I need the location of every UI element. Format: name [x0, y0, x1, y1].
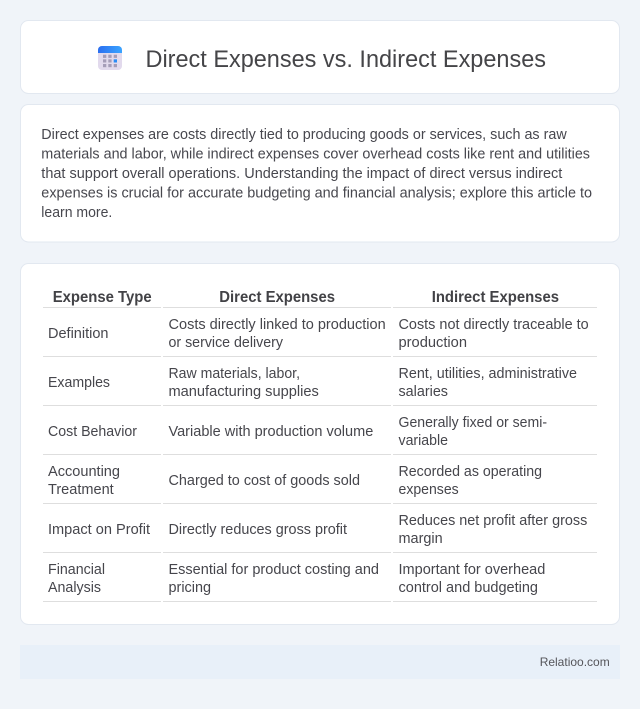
text block: introduction paragraph: expenses is crucial for accurate budgeting and financial analysis; explore this article to — [41, 186, 592, 202]
table header row: Direct Expenses — [219, 289, 335, 306]
panel: introduction — [20, 104, 620, 242]
row: Accounting Treatment: Charged to cost of goods sold — [168, 473, 360, 489]
table header row: Expense Type — [53, 289, 152, 306]
row: Financial Analysis: Essential for product costing and — [168, 562, 379, 578]
row: Examples: salaries — [398, 384, 448, 400]
table header row — [53, 289, 559, 306]
title: Direct Expenses vs. Indirect Expenses — [146, 46, 546, 73]
row: Cost Behavior — [48, 415, 547, 449]
row: Definition: Costs not directly traceable to — [398, 317, 589, 333]
row: Examples: manufacturing supplies — [168, 384, 319, 400]
row: Accounting Treatment: Accounting — [48, 464, 120, 480]
text block: introduction paragraph: that support overall operations. Understanding the impact of direct versus indirect — [41, 166, 562, 182]
row: Impact on Profit — [48, 513, 587, 547]
row: Financial Analysis: Analysis — [48, 580, 101, 596]
row: Definition — [48, 317, 589, 351]
row: Accounting Treatment: expenses — [398, 482, 459, 498]
table header row: Indirect Expenses — [432, 289, 559, 306]
row: Cost Behavior: variable — [398, 433, 448, 449]
footer bar — [20, 645, 620, 679]
row: Impact on Profit: Directly reduces gross profit — [168, 522, 347, 538]
row: Financial Analysis: Financial — [48, 562, 105, 578]
row: Definition: production — [398, 335, 467, 351]
panel: title card — [20, 20, 620, 94]
text block: introduction paragraph — [41, 127, 592, 221]
row: Financial Analysis — [48, 562, 545, 596]
row: Examples: Rent, utilities, administrative — [398, 366, 577, 382]
row: Definition: or service delivery — [168, 335, 284, 351]
row: Impact on Profit: margin — [398, 531, 443, 547]
row: Definition: Definition — [48, 326, 108, 342]
row: Cost Behavior: Variable with production volume — [168, 424, 373, 440]
text block: introduction paragraph: learn more. — [41, 205, 112, 221]
row: Examples — [48, 366, 577, 400]
row: Definition: Costs directly linked to production — [168, 317, 386, 333]
row: Accounting Treatment: Treatment — [48, 482, 114, 498]
row: Cost Behavior: Generally fixed or semi- — [398, 415, 547, 431]
text block: introduction paragraph: Direct expenses are costs directly tied to producing goods or services, such as raw — [41, 127, 567, 143]
row: Examples: Examples — [48, 375, 110, 391]
row: Accounting Treatment: Recorded as operating — [398, 464, 542, 480]
row: Impact on Profit: Impact on Profit — [48, 522, 150, 538]
row: Financial Analysis: pricing — [168, 580, 211, 596]
row: Accounting Treatment — [48, 464, 542, 498]
row: Financial Analysis: control and budgeting — [398, 580, 538, 596]
row: Cost Behavior: Cost Behavior — [48, 424, 137, 440]
icon: calendar — [98, 46, 122, 70]
panel: comparison table — [20, 264, 620, 624]
row: Financial Analysis: Important for overhead — [398, 562, 545, 578]
row: Examples: Raw materials, labor, — [168, 366, 300, 382]
text block: introduction paragraph: materials and labor, while indirect expenses cover overhead costs like rent and utilities — [41, 146, 590, 162]
footer credit: Relatioo.com — [540, 655, 610, 669]
row: Impact on Profit: Reduces net profit after gross — [398, 513, 587, 529]
